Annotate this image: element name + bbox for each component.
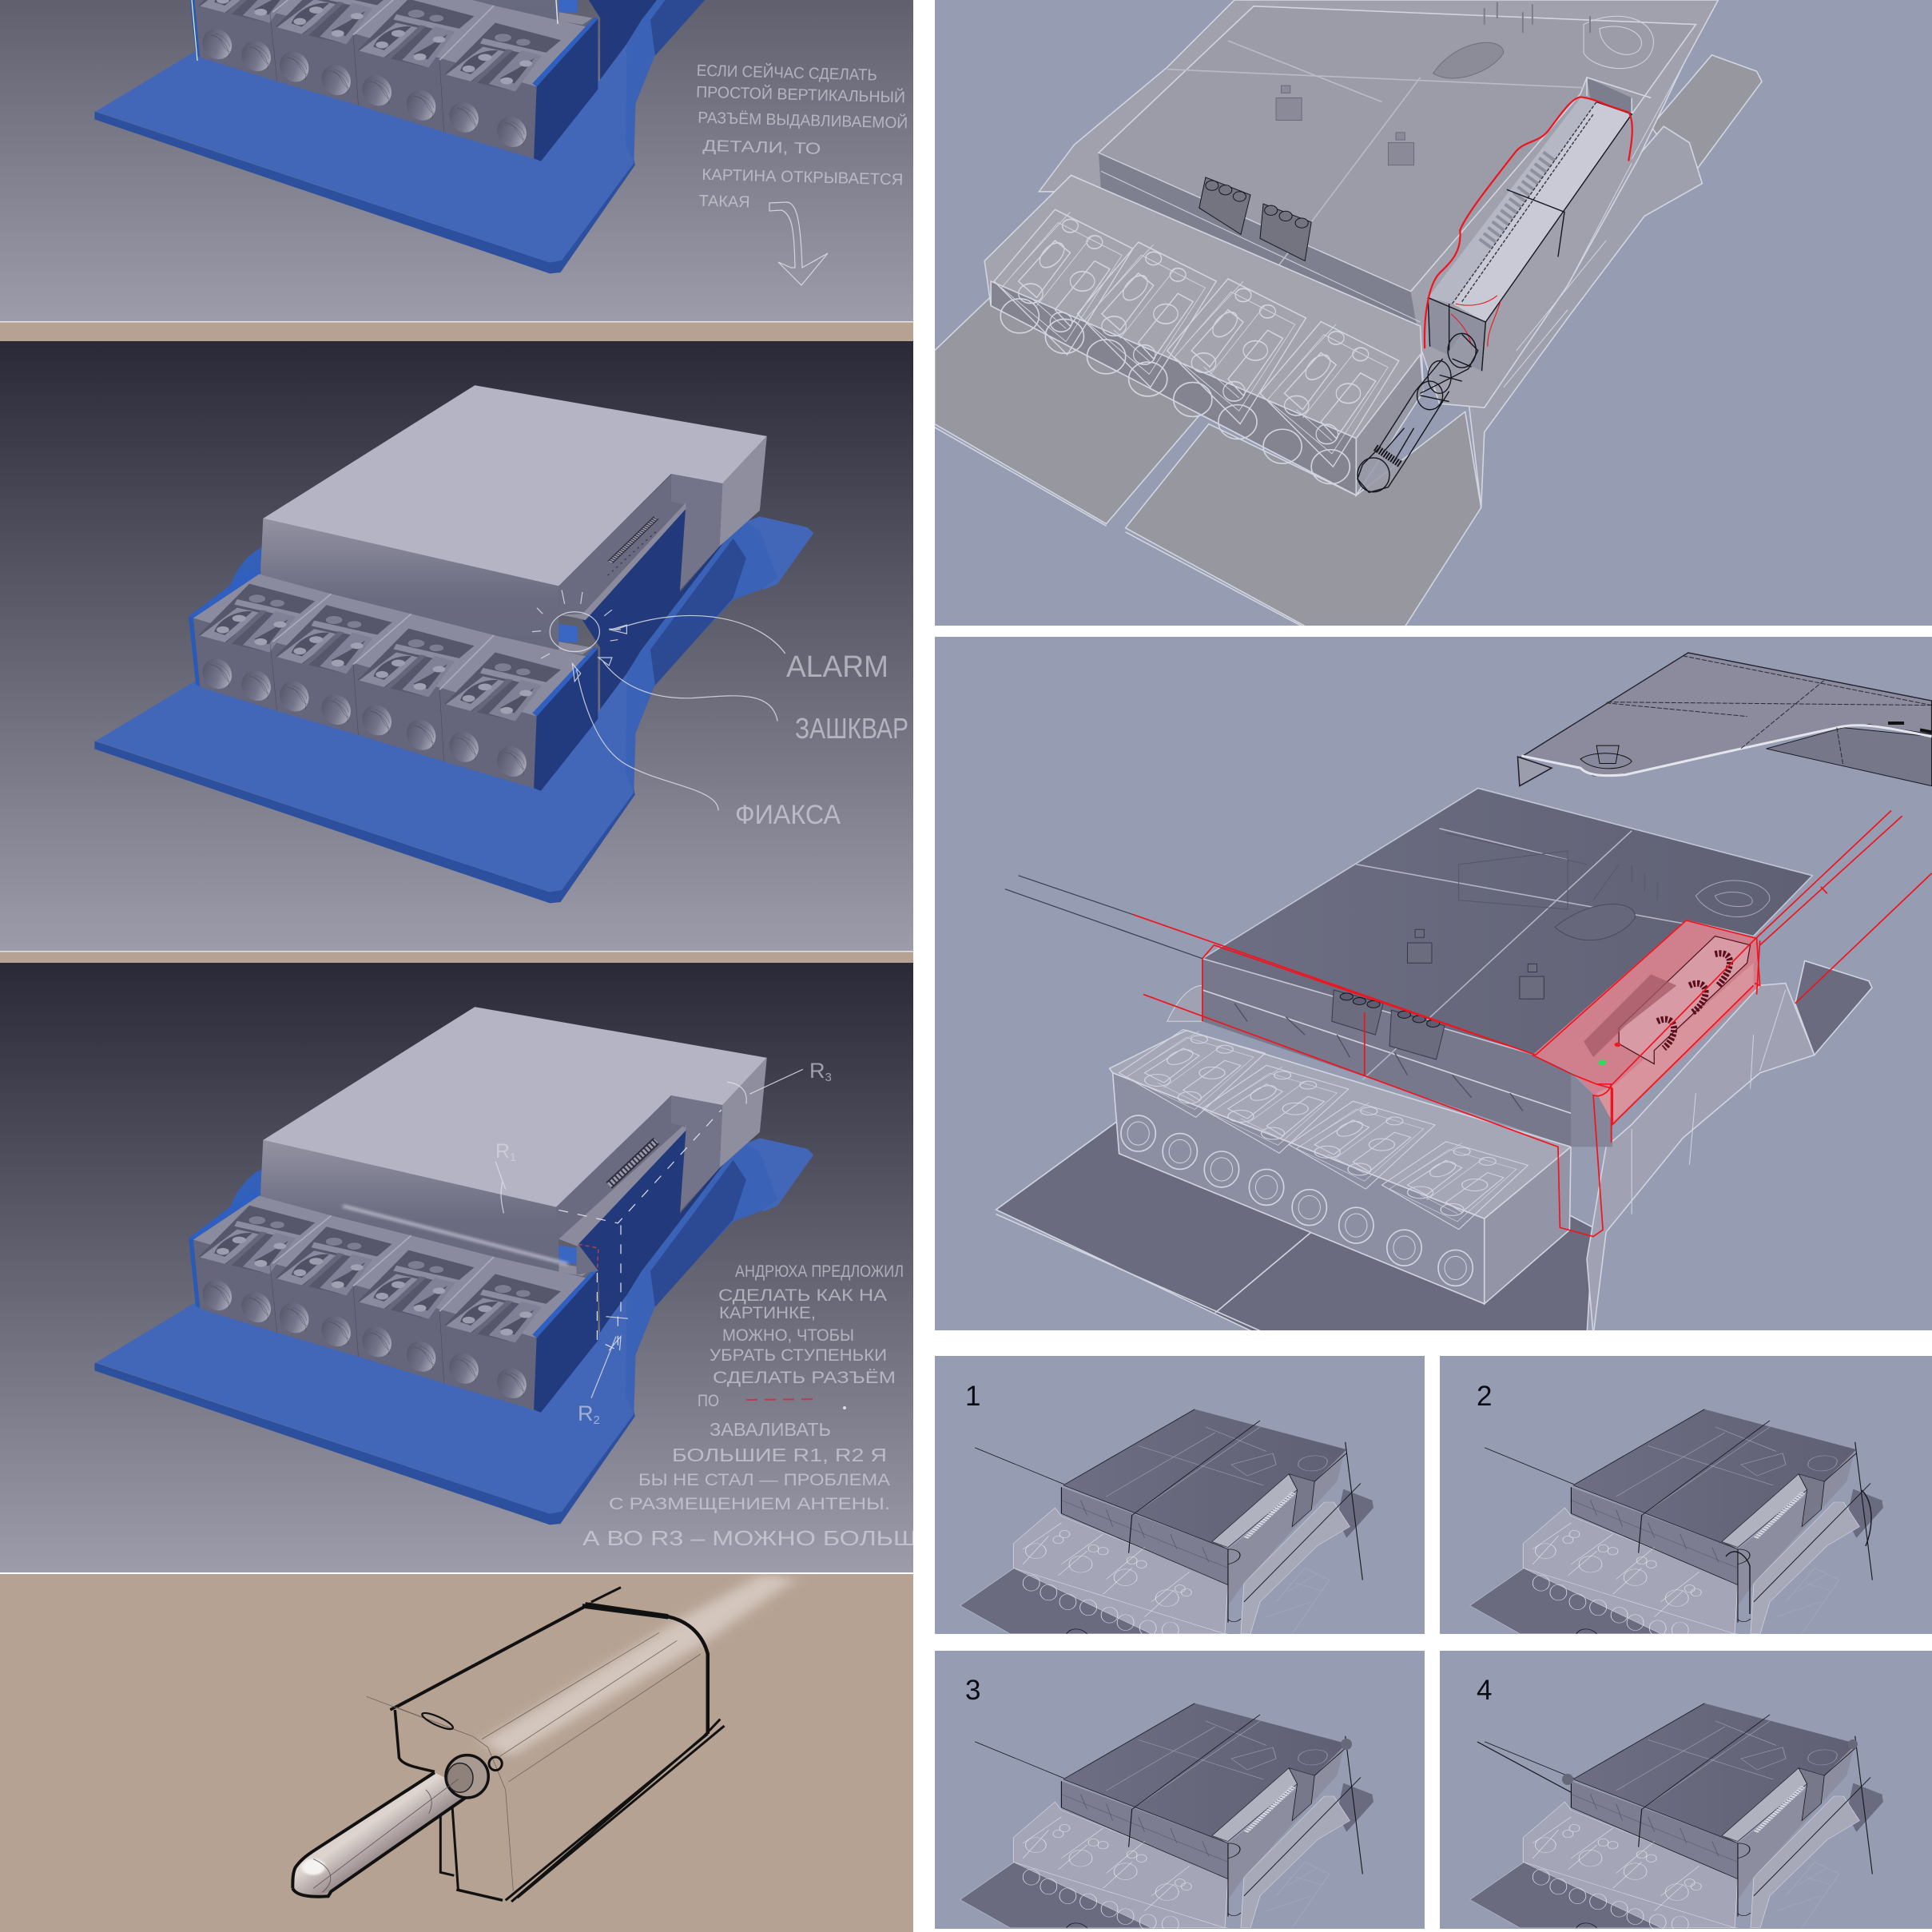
number 3: 3 (965, 1675, 980, 1706)
label: zashkvar: ЗАШКВАР (795, 712, 908, 745)
rolling-ball marker on variant 3 (1341, 1739, 1352, 1750)
handwritten note: vertical split: ТАКАЯ (698, 193, 750, 211)
panel: variant 1 (935, 1356, 1425, 1638)
handwritten note: Andryukha's proposal: АНДРЮХА ПРЕДЛОЖИЛ (735, 1262, 904, 1281)
label: fiaksa: ФИАКСА (735, 800, 841, 830)
handwritten note: radii limits: А ВО R3 – МОЖНО БОЛЬШЕ (582, 1526, 934, 1550)
wireframe thumbnail: variant 1 (960, 1409, 1373, 1638)
handwritten note: vertical split: ДЕТАЛИ, ТО (702, 137, 821, 158)
handwritten note: vertical split: КАРТИНА ОТКРЫВАЕТСЯ (702, 166, 904, 189)
handwritten note: vertical split: ПРОСТОЙ ВЕРТИКАЛЬНЫЙ (696, 82, 905, 106)
panel: notes on the vertical split (0, 0, 913, 321)
handwritten note: Andryukha's proposal: ПО (698, 1392, 719, 1410)
sketch annotations: circle and leaders (532, 590, 785, 811)
model changes: filled notch and dashed split line (343, 1069, 803, 1398)
panel: variant 3 (935, 1651, 1425, 1932)
number 4: 4 (1477, 1675, 1492, 1706)
wireframe thumbnail: variant 3 (960, 1703, 1373, 1932)
second guide line and ball markers on variant 4 (1477, 1739, 1858, 1792)
wireframe model: top view with connector (935, 0, 1762, 628)
handwritten note: Andryukha's proposal: СДЕЛАТЬ КАК НА (718, 1286, 887, 1305)
handwritten note: vertical split: РАЗЪЁМ ВЫДАВЛИВАЕМОЙ (698, 108, 908, 133)
label: R3: 3 (825, 1071, 832, 1084)
3d model: block with proposed split (94, 1007, 813, 1525)
label: R1: R (495, 1140, 510, 1163)
panel: hand sketch of connector (0, 1572, 913, 1932)
handwritten note: radii limits: БОЛЬШИЕ R1, R2 Я (672, 1445, 887, 1465)
handwritten note: vertical split (693, 61, 909, 216)
handwritten note: radii limits (582, 1423, 913, 1545)
label: R2: R (578, 1401, 593, 1425)
number 2: 2 (1477, 1381, 1492, 1412)
panel: wireframe with red split surfaces (935, 637, 1932, 1335)
sketch: connector with antenna (292, 1574, 795, 1902)
wireframe thumbnail: variant 2 (1470, 1409, 1883, 1638)
label: R3: R (809, 1059, 825, 1083)
wireframe thumbnail: variant 4 (1470, 1703, 1883, 1932)
handwritten note: radii limits: БЫ НЕ СТАЛ — ПРОБЛЕМА (638, 1471, 890, 1489)
label: R2: 2 (593, 1413, 600, 1427)
band: tan divider top (0, 321, 913, 341)
rounded corner edits on variant 2 (1726, 1490, 1871, 1614)
handwritten note: Andryukha's proposal: УБРАТЬ СТУПЕНЬКИ (710, 1346, 887, 1365)
panel: variant 4 (1440, 1651, 1932, 1932)
label: ALARM: ALARM (786, 650, 888, 684)
wireframe model: exploded view with red surfaces (996, 653, 1932, 1335)
panel: problem callouts (0, 341, 913, 951)
handwritten note: radii limits: ЗАВАЛИВАТЬ (710, 1419, 831, 1440)
panel: variant 2 (1440, 1356, 1932, 1638)
panel: proposed split with radii (0, 963, 934, 1572)
handwritten note: Andryukha's proposal: СДЕЛАТЬ РАЗЪЁМ (713, 1369, 896, 1387)
3d model: block with notch (94, 385, 813, 903)
label: R1: 1 (510, 1151, 516, 1163)
panel: wireframe with antenna (935, 0, 1932, 628)
handwritten note: Andryukha's proposal: КАРТИНКЕ, (719, 1304, 816, 1322)
number 1: 1 (965, 1381, 980, 1412)
handwritten note: vertical split: ЕСЛИ СЕЙЧАС СДЕЛАТЬ (697, 61, 877, 85)
band: tan divider middle (0, 951, 913, 963)
handwritten note: Andryukha's proposal: МОЖНО, ЧТОБЫ (722, 1326, 854, 1345)
handwritten note: radii limits: С РАЗМЕЩЕНИЕМ АНТЕНЫ. (609, 1495, 890, 1513)
3d model: cropped terminal block (94, 0, 705, 273)
arrow: curved outline pointing down (769, 202, 828, 285)
handwritten note: Andryukha's proposal (698, 1262, 904, 1410)
